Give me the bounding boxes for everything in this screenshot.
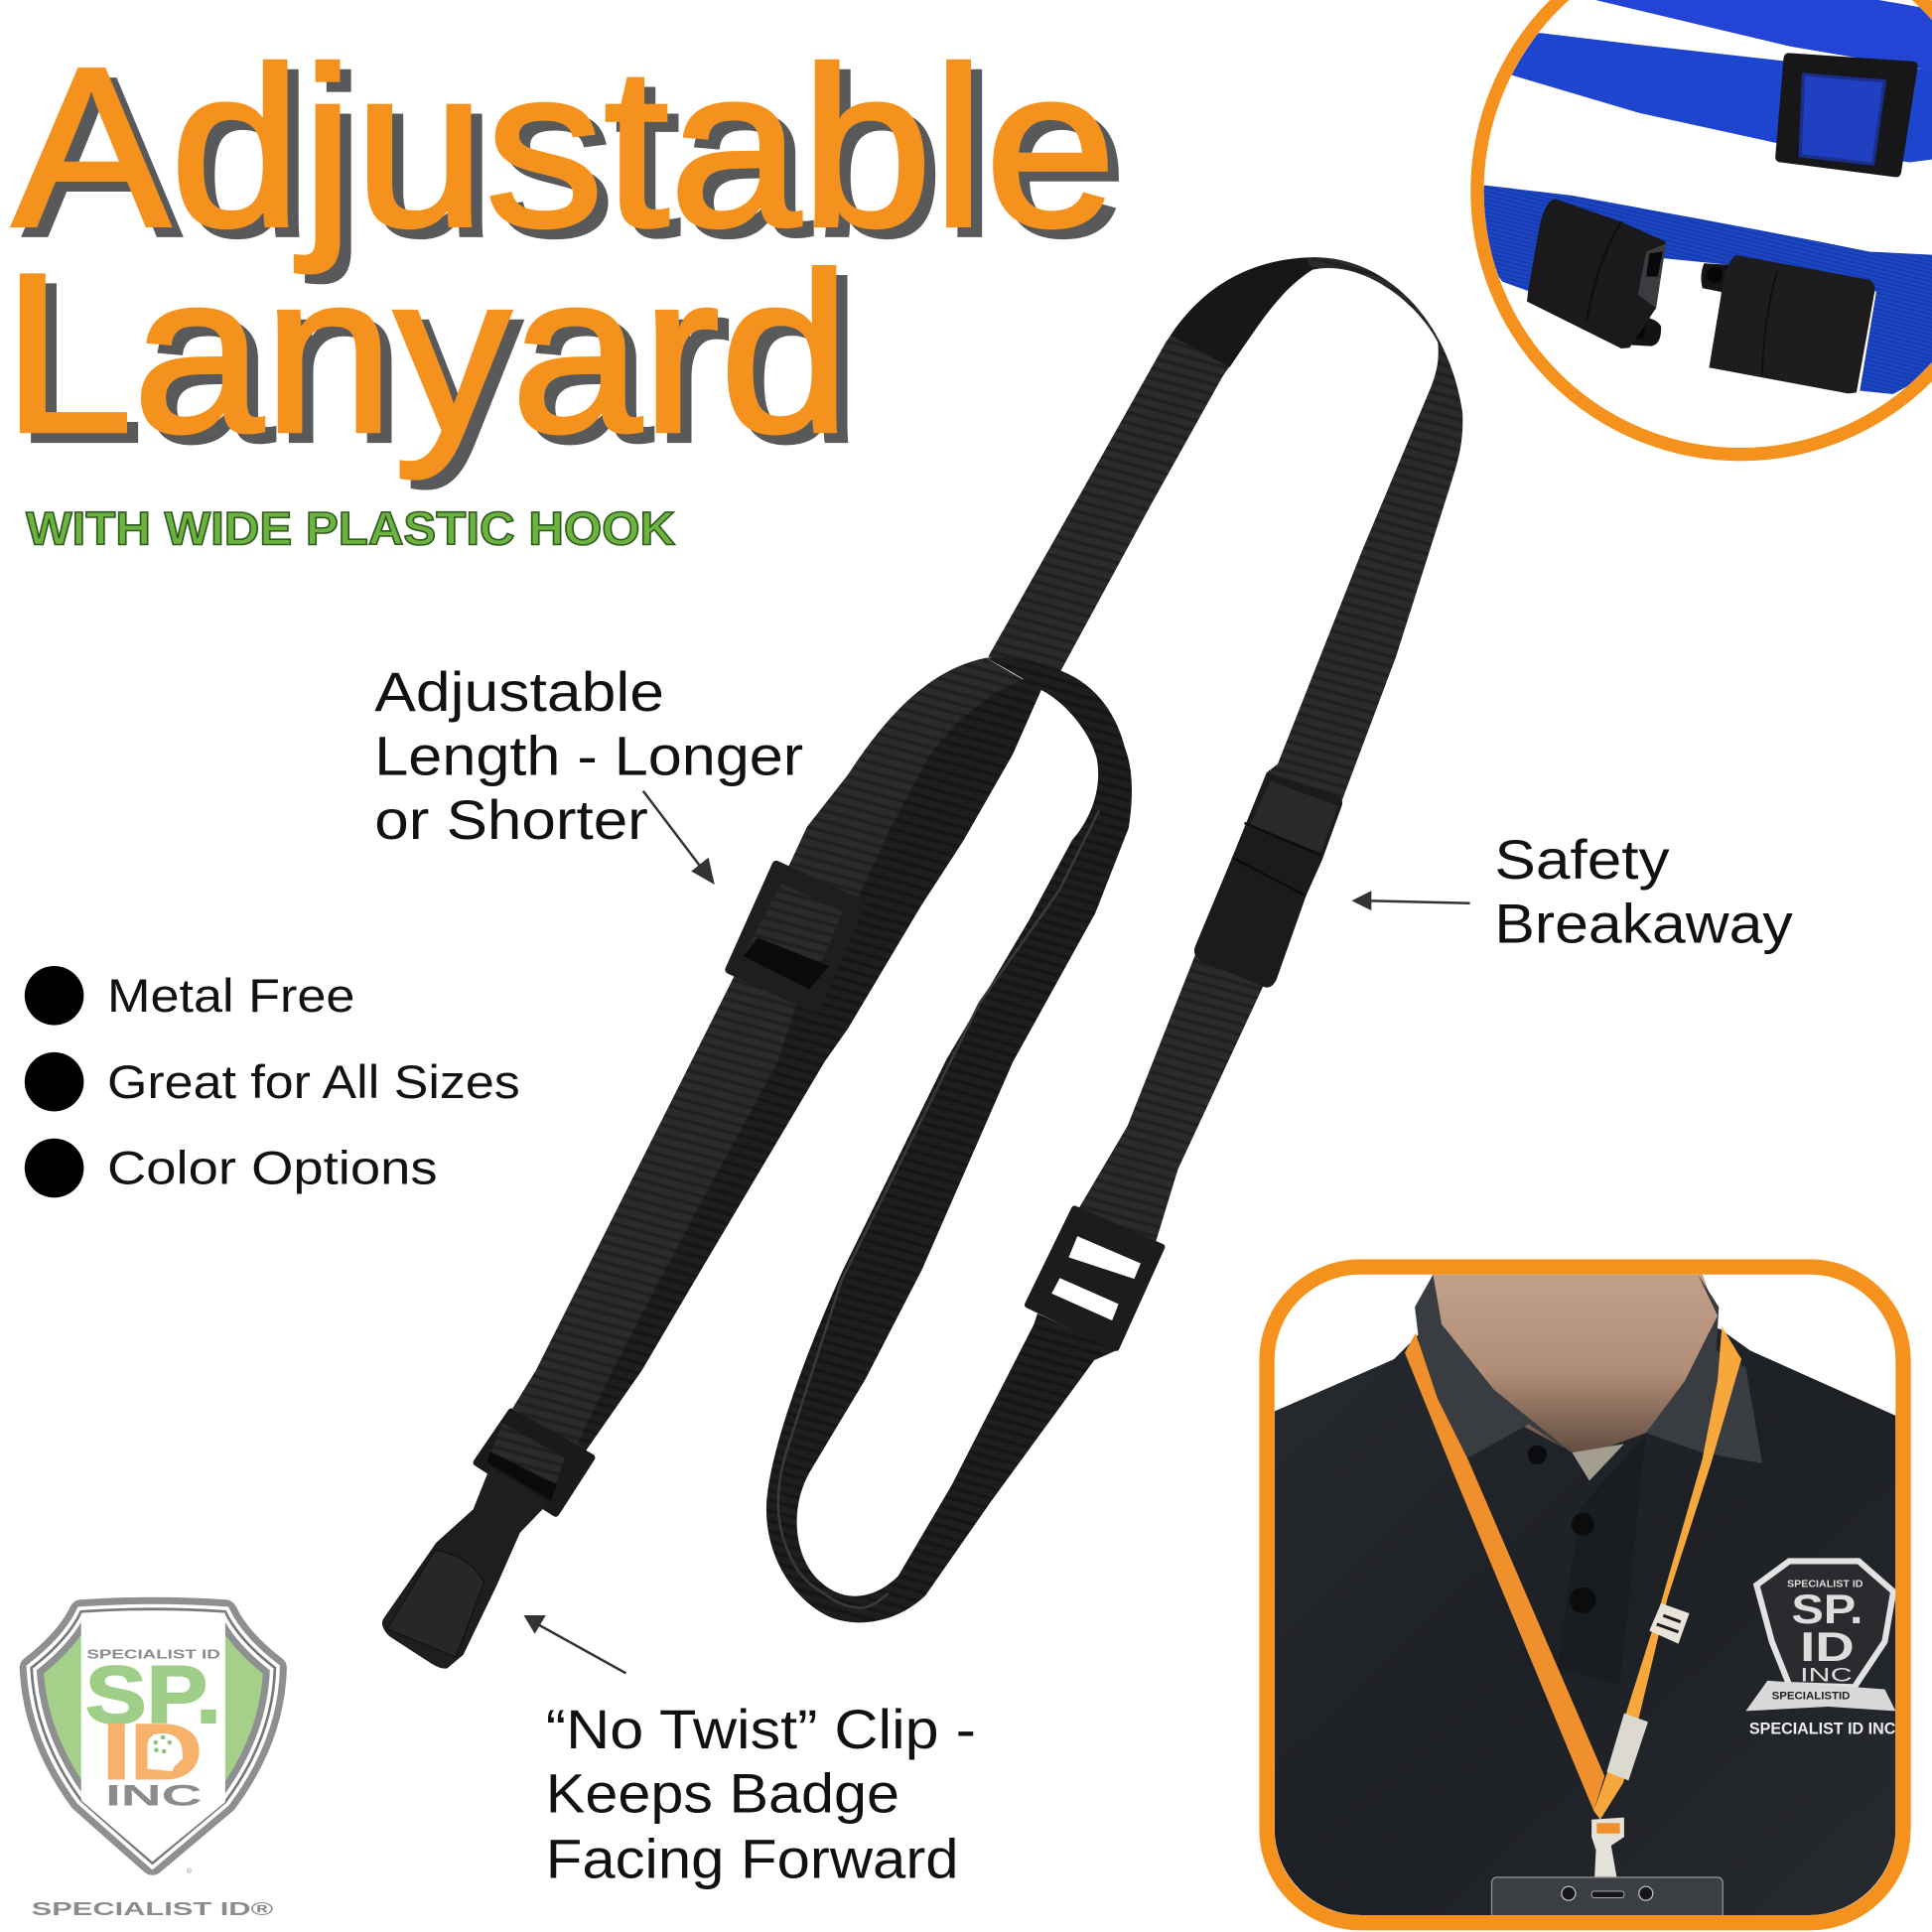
adjuster slider upper	[730, 865, 860, 1008]
bullet: great for all sizes	[25, 1052, 520, 1111]
buttons	[1528, 1446, 1595, 1613]
bullet: color options	[25, 1139, 438, 1197]
feature list	[25, 966, 520, 1197]
arrow: adjustable length	[643, 791, 715, 885]
left connector	[1527, 199, 1666, 348]
bullet: great for all sizes: Great for All Sizes	[107, 1055, 520, 1108]
panel: wearer photo	[1267, 1267, 1903, 1925]
subtitle: WITH WIDE PLASTIC HOOK	[26, 502, 675, 555]
logo lettering: SP.	[85, 1650, 221, 1740]
emblem: SP.	[1791, 1586, 1863, 1632]
logo lettering: SPECIALIST ID®	[32, 1898, 274, 1919]
emblem: SPECIALIST ID INC	[1749, 1720, 1895, 1738]
callout: safety breakaway	[1494, 828, 1793, 954]
logo lettering: INC	[105, 1779, 202, 1812]
bullet: metal free: Metal Free	[107, 969, 354, 1022]
panel: breakaway close-up circle	[1472, 0, 1932, 455]
title: Adjustable	[12, 21, 1116, 274]
title: Lanyard	[2, 226, 850, 480]
orange ring	[1477, 0, 1932, 455]
loop seam	[778, 811, 1099, 1608]
logo lettering	[32, 1648, 274, 1919]
adjuster slider lower	[1028, 1208, 1162, 1348]
arrow: no twist clip	[523, 1615, 625, 1673]
logo lettering: SPECIALIST ID	[86, 1648, 220, 1662]
square slider	[1780, 58, 1913, 172]
neck	[1431, 1268, 1718, 1456]
callout: adjustable length: Adjustable	[374, 660, 664, 723]
right collar	[1646, 1275, 1762, 1463]
placket	[1557, 1436, 1646, 1685]
panel: lanyard product	[382, 257, 1462, 1669]
left collar	[1415, 1275, 1575, 1459]
right connector	[1701, 255, 1874, 393]
badge holder	[1491, 1876, 1724, 1915]
white hook	[1591, 1817, 1624, 1876]
callout: adjustable length: Length - Longer	[374, 725, 803, 787]
logo lettering: ID	[102, 1709, 202, 1796]
title: Lanyard	[14, 236, 862, 489]
callout: no twist clip: Facing Forward	[546, 1827, 959, 1889]
callout: no twist clip	[546, 1698, 976, 1889]
callout: adjustable length: or Shorter	[374, 788, 648, 851]
blue strap middle	[1472, 32, 1932, 162]
callout: no twist clip: “No Twist” Clip -	[546, 1698, 976, 1760]
orange frame	[1267, 1267, 1903, 1923]
white slider	[1649, 1603, 1690, 1644]
blue strap lower	[1472, 184, 1932, 394]
neck strap	[988, 257, 1462, 801]
bullet: metal free	[25, 966, 354, 1026]
undershirt	[1572, 1444, 1624, 1481]
emblem	[1745, 1561, 1895, 1738]
shield	[32, 1609, 275, 1863]
long strap to clip	[512, 658, 1041, 1451]
front loop strap	[766, 657, 1132, 1622]
callout: adjustable length	[374, 660, 803, 851]
arrow: safety breakaway	[1351, 891, 1470, 910]
logo lettering: ®	[187, 1866, 193, 1875]
back layer of long strap	[578, 675, 1041, 1451]
title: Adjustable	[24, 31, 1128, 284]
logo: specialist id shield	[32, 1609, 275, 1919]
callout: safety breakaway: Safety	[1494, 828, 1670, 891]
white breakaway	[1606, 1714, 1648, 1780]
emblem: SPECIALISTID	[1772, 1691, 1850, 1703]
bullet: color options: Color Options	[107, 1142, 438, 1194]
lower right strap	[1075, 955, 1269, 1242]
blue strap upper	[1582, 0, 1932, 71]
title	[2, 21, 1128, 489]
callout: no twist clip: Keeps Badge	[546, 1762, 899, 1825]
callout: safety breakaway: Breakaway	[1494, 892, 1793, 954]
emblem: INC	[1800, 1665, 1853, 1687]
emblem: SPECIALIST ID	[1787, 1580, 1863, 1590]
no twist hook	[382, 1466, 548, 1669]
clip slider	[477, 1412, 592, 1513]
orange lanyard left	[1405, 1333, 1604, 1811]
emblem: ID	[1800, 1623, 1855, 1670]
shirt	[1275, 1328, 1895, 1919]
orange lanyard right	[1593, 1326, 1741, 1820]
neck strap shadow at top	[1171, 257, 1312, 367]
breakaway buckle	[1194, 772, 1342, 988]
